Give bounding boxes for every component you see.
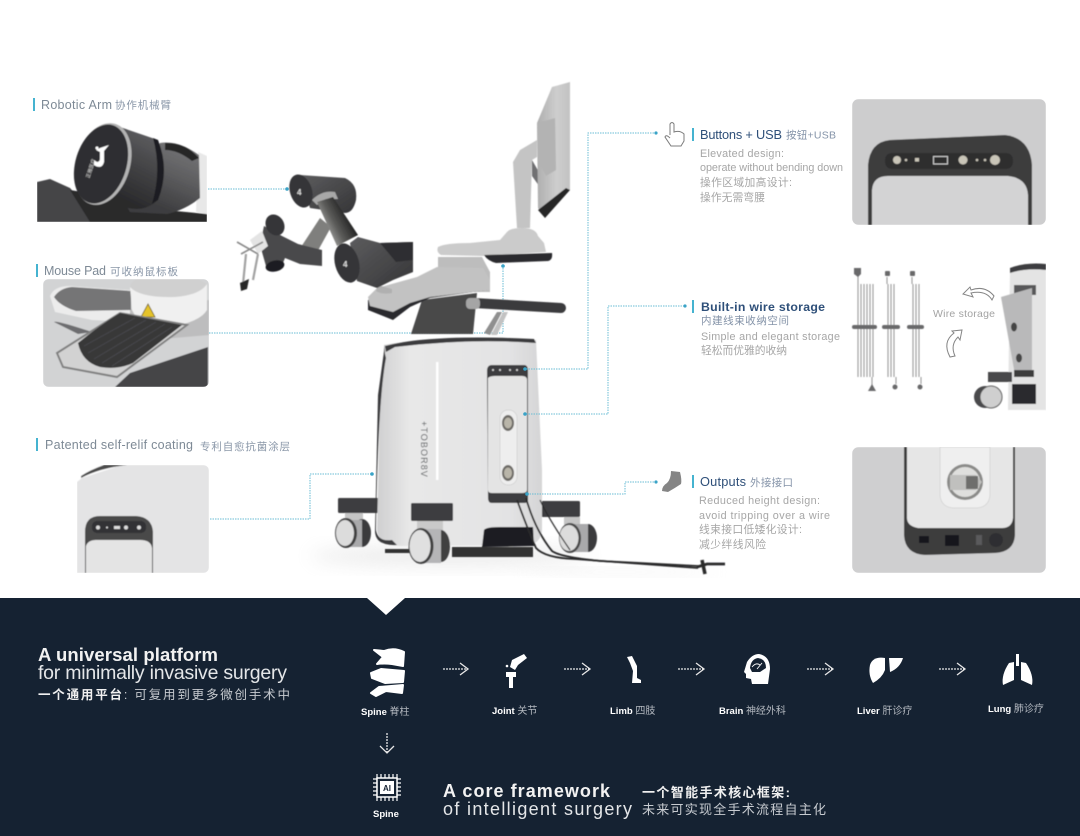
connector panel on body — [487, 365, 528, 503]
text: outputs: 线束接口低矮化设计: — [699, 522, 802, 536]
heading: core framework: 一个智能手术核心框架: — [642, 785, 790, 800]
text: outputs: Outputs — [700, 474, 746, 489]
text: wire storage — [692, 300, 840, 357]
label: joint: Joint 关节 — [492, 704, 537, 717]
label: AI spine: Spine — [373, 809, 399, 820]
panel: robotic arm detail image: 正雅医疗 — [85, 158, 97, 179]
marker: mouse pad end dot — [501, 264, 505, 268]
panel: buttons detail image — [852, 99, 1046, 225]
heading: universal platform — [38, 644, 290, 702]
connector: robotic arm — [208, 187, 289, 191]
panel: robotic arm detail image — [37, 116, 207, 222]
arrow: joint to limb — [564, 663, 590, 675]
icon: pointing hand — [665, 122, 684, 146]
arrow: liver to lung — [939, 663, 965, 675]
panel: mouse pad detail image — [43, 279, 209, 387]
label: wire storage: Wire storage — [933, 308, 995, 320]
monitor — [537, 82, 570, 218]
turntable platform — [437, 228, 552, 292]
connector: coating — [210, 472, 374, 519]
panel: outputs detail image — [852, 447, 1046, 573]
panel: robotic arm label: 协作机械臂 — [115, 98, 172, 112]
robotic arm: 4 — [343, 260, 348, 269]
text: outputs: avoid tripping over a wire — [699, 510, 830, 522]
connector: buttons — [523, 131, 658, 371]
dark column — [411, 293, 477, 334]
icon: limb — [627, 656, 641, 683]
label: spine: Spine 脊柱 — [361, 705, 410, 718]
heading: core framework: 未来可实现全手术流程自主化 — [642, 802, 826, 817]
heading: core framework — [443, 781, 826, 819]
text: buttons and USB: Elevated design: — [700, 148, 784, 160]
arrow: limb to brain — [678, 663, 704, 675]
text: buttons and USB — [692, 127, 843, 204]
icon: lung — [1003, 654, 1032, 685]
surgical tool — [237, 231, 268, 291]
icon: curved arrows — [947, 287, 994, 357]
shoulder ring — [368, 267, 490, 320]
panel: bottom dark band — [0, 598, 1080, 836]
text: buttons and USB: 按钮+USB — [786, 128, 836, 142]
monitor arm — [513, 140, 547, 228]
icon: AI chip — [373, 774, 401, 801]
connector: wire storage — [523, 304, 687, 416]
arrow: spine to AI core — [380, 733, 394, 753]
arrow: brain to liver — [807, 663, 833, 675]
panel: mouse pad label — [36, 264, 178, 278]
panel: mouse pad label: Mouse Pad — [44, 264, 106, 278]
illustration: surgical robot — [237, 82, 725, 574]
panel: mouse pad label: 可收纳鼠标板 — [110, 265, 178, 278]
cabinet body — [375, 338, 542, 547]
panel: coating label — [36, 438, 290, 453]
text: buttons and USB: operate without bending down — [700, 162, 843, 174]
text: wire storage: 轻松而优雅的收纳 — [701, 343, 787, 357]
robotic arm — [260, 171, 413, 294]
label: limb: Limb 四肢 — [610, 704, 655, 717]
text: wire storage: 内建线束收纳空间 — [701, 314, 789, 327]
icon: joint — [506, 654, 527, 688]
front block and wheel — [385, 503, 533, 564]
text: buttons and USB: Buttons + USB — [700, 127, 782, 142]
label: brain: Brain 神经外科 — [719, 704, 786, 717]
cables and connector — [517, 498, 725, 574]
text: outputs: 减少绊线风险 — [699, 537, 766, 551]
label: liver: Liver 肝诊疗 — [857, 704, 912, 717]
base bars and rear wheels — [335, 498, 597, 553]
handle — [466, 298, 561, 335]
panel: coating label: Patented self-relif coating — [45, 438, 193, 452]
text: outputs — [692, 474, 830, 551]
icon: brain — [744, 654, 770, 684]
icon: AI chip: AI — [383, 784, 391, 793]
text: wire storage: Simple and elegant storage — [701, 331, 840, 343]
text: buttons and USB: 操作区域加高设计: — [700, 175, 792, 189]
panel: coating label: 专利自愈抗菌涂层 — [200, 440, 290, 453]
robotic arm: 4 — [297, 188, 302, 197]
connector: outputs — [525, 480, 658, 496]
arrow: spine to joint — [443, 663, 468, 675]
panel: robotic arm label: Robotic Arm — [41, 98, 112, 112]
label: lung: Lung 肺诊疗 — [988, 702, 1044, 715]
heading: core framework: A core framework — [443, 781, 611, 801]
heading: universal platform: A universal platform — [38, 644, 218, 665]
illustration: wire bundles — [852, 268, 924, 391]
panel: robotic arm label — [33, 98, 172, 112]
floor shadow — [310, 546, 720, 575]
text: wire storage: Built-in wire storage — [701, 300, 825, 314]
text: outputs: 外接接口 — [750, 476, 793, 489]
product name on body: +TOBOR8V — [419, 421, 429, 478]
illustration: cabinet with open door — [974, 264, 1046, 410]
icon: spine — [371, 649, 404, 696]
connector: mouse pad — [209, 267, 503, 333]
icon: liver — [869, 658, 903, 683]
text: buttons and USB: 操作无需弯腰 — [700, 190, 765, 204]
heading: core framework: of intelligent surgery — [443, 799, 632, 819]
heading: universal platform: for minimally invasive surgery — [38, 662, 287, 684]
heading: universal platform: 一个通用平台: 可复用到更多微创手术中 — [38, 687, 290, 702]
text: outputs: Reduced height design: — [699, 495, 820, 507]
icon: foot — [662, 471, 681, 492]
panel: coating detail image — [77, 465, 209, 573]
